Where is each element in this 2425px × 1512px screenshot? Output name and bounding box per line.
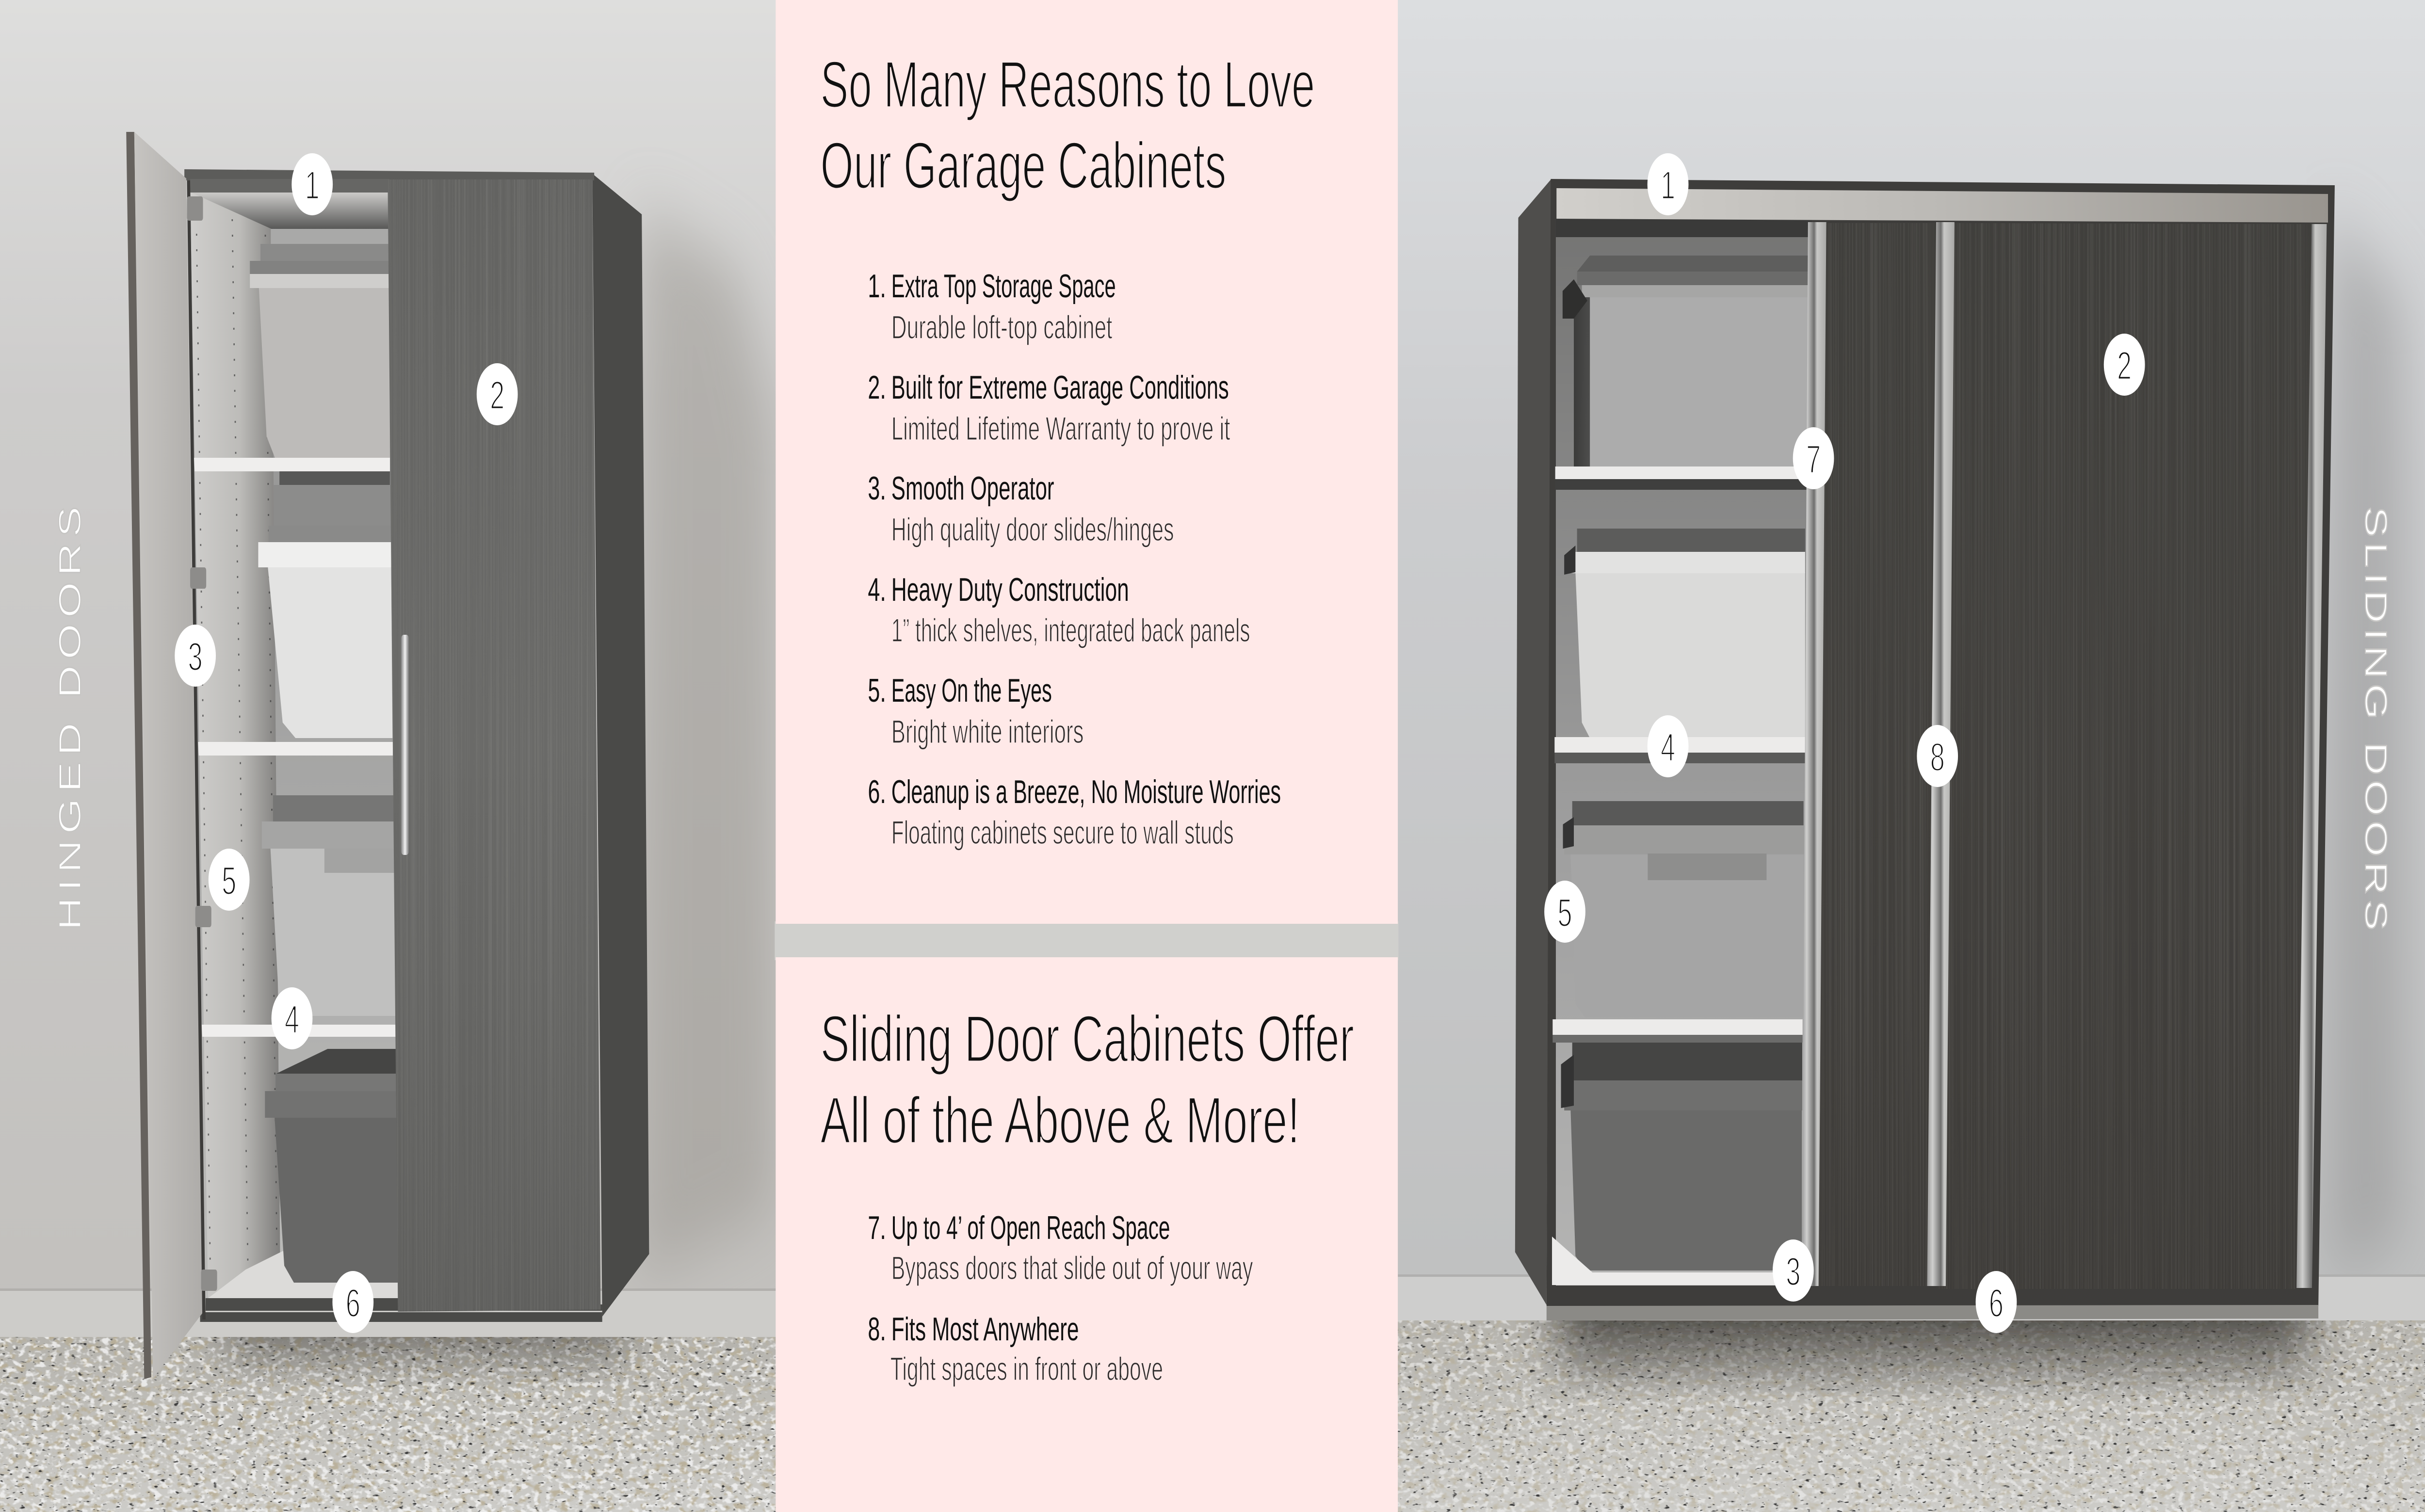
pull handle — [401, 635, 409, 855]
bin 1 — [250, 229, 390, 458]
badge 3 — [1773, 1239, 1814, 1302]
item 8 — [868, 1311, 1163, 1387]
badge 5 — [1544, 881, 1585, 943]
badge 4 — [272, 987, 312, 1049]
shelf 3 — [1552, 1019, 1803, 1035]
badge 4 — [1648, 715, 1688, 777]
panel: sliding door extras — [776, 957, 1398, 1512]
shelf 2 — [1554, 737, 1805, 753]
badge 3: 3 — [188, 634, 203, 679]
heading: reasons: Our Garage Cabinets — [820, 129, 1226, 202]
badge 2 — [2104, 334, 2145, 396]
badge 8 — [1917, 725, 1958, 787]
bin 4 — [1561, 1043, 1802, 1271]
badge 2: 2 — [490, 373, 504, 418]
label: sliding doors: SLIDING DOORS — [2359, 506, 2393, 931]
interior side wall — [190, 192, 280, 1300]
bin 1 — [1563, 256, 1809, 466]
bin 4 — [265, 1049, 398, 1283]
item 5: Easy On the Eyes — [891, 673, 1052, 709]
shelf 1 — [1555, 466, 1807, 479]
badge 3 — [175, 625, 216, 687]
bin 2 — [1564, 529, 1805, 738]
right room background — [1397, 0, 2425, 1512]
badge 3: 3 — [1786, 1249, 1800, 1294]
badge 1: 1 — [305, 163, 320, 208]
item 7: Bypass doors that slide out of your way — [891, 1250, 1253, 1287]
badge 1 — [291, 153, 333, 215]
item 2 — [868, 370, 1230, 447]
item 3: 3. — [868, 470, 886, 507]
item 4: 4. — [868, 572, 886, 608]
item 6: 6. — [868, 774, 886, 810]
heading: sliding doors — [820, 1003, 1354, 1157]
short sliding door — [1818, 223, 1936, 1286]
badge 5 — [209, 849, 250, 911]
aluminium door stile middle — [1927, 222, 1955, 1286]
interior ceiling — [190, 192, 389, 229]
gap between text panels — [775, 921, 1398, 960]
label: hinged doors: HINGED DOORS — [53, 506, 87, 931]
cabinet top edge — [184, 169, 594, 193]
hinges — [187, 196, 217, 1291]
item 7: 7. — [868, 1210, 886, 1246]
item 2: Limited Lifetime Warranty to prove it — [891, 411, 1230, 447]
item 1: Durable loft-top cabinet — [891, 309, 1112, 346]
item 6 — [868, 774, 1281, 851]
item 8: Tight spaces in front or above — [890, 1351, 1163, 1387]
item 1: 1. — [868, 268, 886, 305]
badge 4: 4 — [285, 997, 299, 1042]
cabinet floor — [208, 1251, 398, 1298]
cabinet floor — [1552, 1237, 1776, 1285]
bin 3 — [262, 795, 396, 1016]
item 2: Built for Extreme Garage Conditions — [891, 370, 1229, 406]
badge 4: 4 — [1661, 725, 1675, 770]
heading: reasons — [820, 48, 1315, 202]
cabinet interior back — [190, 192, 405, 1300]
shelf pin holes — [196, 219, 277, 1280]
badge 7 — [1793, 427, 1834, 489]
badge 6 — [1976, 1271, 2017, 1333]
item 5: 5. — [868, 673, 886, 709]
cabinet side panel — [1515, 179, 1552, 1305]
open door — [126, 132, 206, 1379]
item 6: Cleanup is a Breeze, No Moisture Worries — [891, 774, 1281, 810]
badge 6 — [332, 1271, 373, 1333]
item 4: 1” thick shelves, integrated back panels — [891, 612, 1250, 649]
wide sliding door — [1938, 223, 2312, 1289]
hinged cabinet illustration — [126, 132, 649, 1379]
item 3: Smooth Operator — [891, 470, 1054, 507]
cabinet side panel — [592, 174, 649, 1317]
bin 2 — [258, 485, 392, 738]
aluminium door stile left — [1802, 222, 1827, 1286]
panel: reasons to love — [776, 0, 1398, 924]
bin clasp — [1563, 279, 1587, 319]
cabinet front frame — [1547, 179, 2335, 1306]
top aluminium rail — [1556, 188, 2328, 223]
badge 8: 8 — [1930, 735, 1945, 779]
shelf 1 — [194, 458, 390, 471]
bin clasp — [1563, 817, 1574, 849]
sliding cabinet number badges — [1544, 153, 2145, 1333]
item 4 — [868, 572, 1250, 649]
badge 5: 5 — [222, 858, 236, 903]
badge 1 — [1648, 153, 1688, 215]
item 3 — [868, 470, 1174, 548]
bottom light strip — [1547, 1305, 2318, 1320]
sliding cabinet illustration — [1515, 179, 2335, 1320]
item 7 — [868, 1210, 1253, 1287]
item 4: Heavy Duty Construction — [891, 572, 1129, 608]
badge 2 — [477, 363, 518, 425]
bin clasp — [1561, 1055, 1574, 1108]
item 3: High quality door slides/hinges — [891, 512, 1174, 548]
badge 6: 6 — [346, 1281, 360, 1325]
shelf 3 — [202, 1025, 396, 1037]
item 5 — [868, 673, 1083, 750]
heading: sliding doors: Sliding Door Cabinets Offer — [820, 1003, 1354, 1076]
aluminium door stile right — [2296, 224, 2327, 1288]
item 7: Up to 4’ of Open Reach Space — [891, 1210, 1170, 1246]
shelf 2 — [198, 742, 393, 756]
left room background — [0, 0, 777, 1512]
badge 7: 7 — [1806, 437, 1821, 482]
badge 5: 5 — [1557, 890, 1572, 935]
badge 6: 6 — [1989, 1281, 2004, 1325]
bin clasp — [1564, 546, 1575, 575]
door panel with pull handle — [388, 179, 600, 1312]
heading: sliding doors: All of the Above & More! — [820, 1084, 1300, 1157]
item 2: 2. — [868, 370, 886, 406]
item 1 — [868, 268, 1116, 346]
badge 1: 1 — [1661, 163, 1675, 208]
item 1: Extra Top Storage Space — [891, 268, 1116, 305]
item 8: Fits Most Anywhere — [891, 1311, 1079, 1348]
item 8: 8. — [868, 1311, 886, 1348]
badge 2: 2 — [2117, 343, 2132, 388]
heading: reasons: So Many Reasons to Love — [820, 48, 1315, 121]
item 6: Floating cabinets secure to wall studs — [891, 815, 1234, 851]
item 5: Bright white interiors — [891, 714, 1083, 750]
cabinet bottom edge — [200, 1298, 602, 1322]
hinged cabinet number badges — [175, 153, 518, 1333]
bin 3 — [1563, 801, 1804, 1017]
cabinet interior — [1556, 219, 1812, 1286]
